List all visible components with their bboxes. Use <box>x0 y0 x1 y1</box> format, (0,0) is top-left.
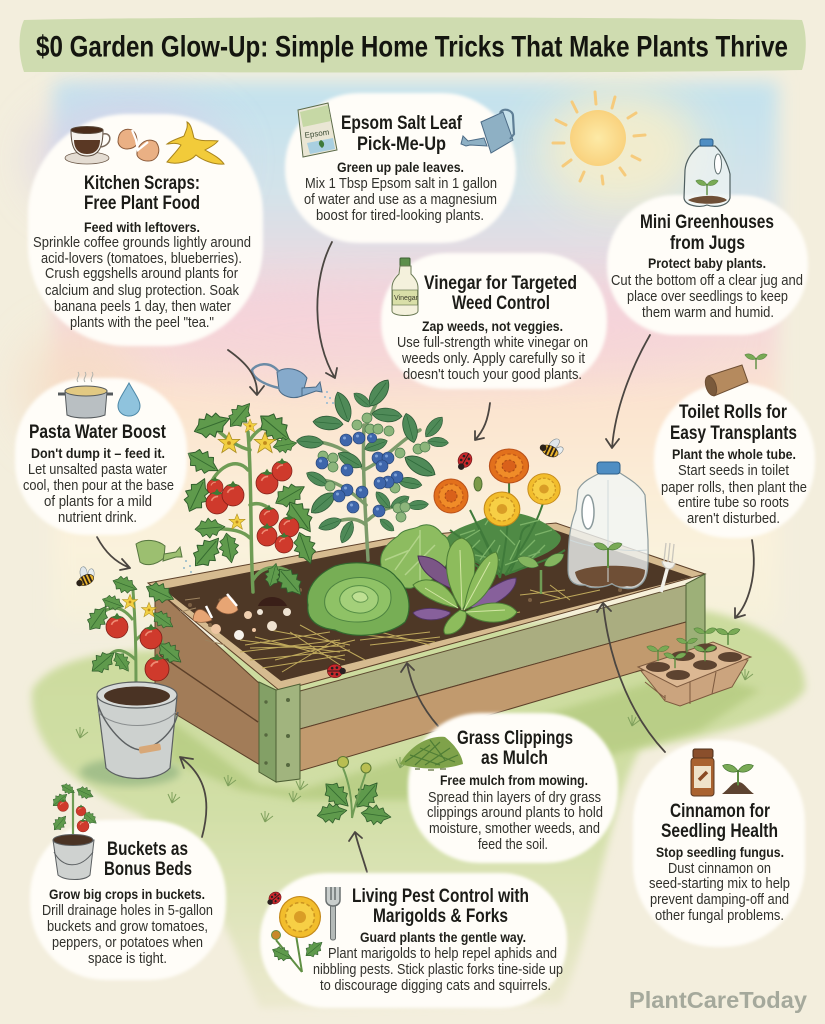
ladybug on rim <box>327 664 346 678</box>
body text: Spread thin layers of dry grass <box>428 790 601 806</box>
heading: Toilet Rolls for <box>679 402 787 423</box>
subheading: Green up pale leaves. <box>337 159 464 175</box>
heading: Pasta Water Boost <box>29 422 167 443</box>
heading line 2: Bonus Beds <box>104 859 192 880</box>
front upper plank <box>300 585 686 729</box>
subheading: Plant the whole tube. <box>672 446 796 462</box>
panel: grass clippings <box>400 713 618 863</box>
grass tufts <box>76 669 753 822</box>
blueberry bush <box>296 376 449 560</box>
panel: buckets <box>30 781 226 980</box>
body text: doesn't touch your good plants. <box>403 367 582 383</box>
subheading: Protect baby plants. <box>648 255 766 271</box>
panel: toilet rolls <box>654 354 815 538</box>
arrow: pasta to can <box>97 537 130 570</box>
panel: kitchen scraps <box>28 114 263 346</box>
red-veined greens <box>413 538 517 634</box>
arrow: pest control to dandelion <box>349 832 367 872</box>
body text <box>649 861 790 924</box>
heading line 2: from Jugs <box>670 233 745 254</box>
arrow: kitchen to tomato <box>228 350 264 395</box>
icon: coffee cup <box>65 126 110 164</box>
body text: weeds only. Apply carefully so it <box>401 351 585 367</box>
card background <box>28 114 263 346</box>
heading: Grass Clippings <box>457 728 573 749</box>
bed rim <box>148 523 705 691</box>
soil <box>163 529 692 681</box>
body text: of plants for a mild <box>44 494 152 510</box>
bee near marigolds <box>538 432 568 461</box>
heading: Vinegar for Targeted <box>424 273 577 294</box>
arrow: vinegar to weeds <box>475 403 490 440</box>
icon: water drop <box>118 383 140 416</box>
icon: cinnamon jar <box>691 749 714 796</box>
body text: calcium and slug protection. Soak <box>45 283 240 299</box>
body text: space is tight. <box>88 951 167 967</box>
icon: blue watering can <box>252 364 334 404</box>
ladybug near marigolds <box>454 450 475 473</box>
icon: jug with seedling <box>684 139 730 206</box>
card background <box>633 740 805 947</box>
eggshells in soil <box>193 594 291 640</box>
body text <box>313 946 563 994</box>
heading line 2: Marigolds & Forks <box>373 906 508 927</box>
body text <box>611 273 803 321</box>
arrow: cinnamon to jug <box>597 603 665 752</box>
body text <box>23 462 174 526</box>
body text: seed-starting mix to help <box>649 876 790 892</box>
heading line 2: Pick-Me-Up <box>357 134 446 155</box>
panel: living pest control <box>260 873 567 1008</box>
plastic jug greenhouse <box>568 462 648 589</box>
body text: Cut the bottom off a clear jug and <box>611 273 803 289</box>
body text: plants with the peel "tea." <box>70 315 214 331</box>
body text: Start seeds in toilet <box>678 463 789 479</box>
heading line 2: Seedling Health <box>661 821 778 842</box>
subheading: Don't dump it – feed it. <box>31 445 165 461</box>
body text: moisture, smother weeds, and <box>429 821 600 837</box>
seedling in bed <box>516 550 566 594</box>
card background <box>654 383 815 538</box>
plastic fork in soil <box>661 543 675 592</box>
body text <box>397 335 588 383</box>
heading line 2: Free Plant Food <box>84 193 200 214</box>
green shade under bed <box>170 670 760 800</box>
bee near bucket plant <box>70 562 99 589</box>
subheading: Grow big crops in buckets. <box>49 886 205 902</box>
heading line 2: as Mulch <box>481 748 548 769</box>
marigold patch <box>434 449 565 578</box>
body text <box>33 235 251 331</box>
icon: epsom bag: Epsom <box>304 128 330 140</box>
heading: Cinnamon for <box>670 801 770 822</box>
corner post right <box>686 574 705 666</box>
body text: to discourage digging cats and squirrels. <box>320 978 551 994</box>
icon: eggshells <box>118 129 159 161</box>
tomato plant <box>179 397 321 602</box>
bed left side <box>155 588 260 765</box>
body text: Crush eggshells around plants for <box>45 266 238 282</box>
body text <box>42 903 213 967</box>
body text: Let unsalted pasta water <box>28 462 167 478</box>
raised garden bed <box>80 523 760 800</box>
body text: prevent damping-off and <box>650 892 789 908</box>
corner post front <box>259 682 300 782</box>
body text: boost for tired-looking plants. <box>316 208 484 224</box>
card background <box>607 195 808 335</box>
card background <box>15 378 187 535</box>
panel: epsom salt <box>285 93 516 243</box>
icon: fork <box>326 887 340 940</box>
body text: Plant marigolds to help repel aphids and <box>328 946 557 962</box>
body text: entire tube so roots <box>678 495 789 511</box>
panel: vinegar <box>381 253 607 389</box>
body text: Drill drainage holes in 5-gallon <box>42 903 213 919</box>
body text: acid-lovers (tomatoes, blueberries). <box>41 251 242 267</box>
front lower plank <box>300 622 686 771</box>
dandelion weed <box>315 756 392 827</box>
icon: vinegar bottle: Vinegar <box>394 295 419 302</box>
card background <box>260 873 567 1008</box>
icon: vinegar bottle <box>392 258 419 316</box>
card background <box>408 713 618 863</box>
heading line 2: Easy Transplants <box>670 423 797 444</box>
icon: marigold <box>270 893 327 972</box>
soil specks <box>180 558 622 645</box>
arrow: jug card to jug <box>606 335 650 448</box>
body text: them warm and humid. <box>642 305 774 321</box>
arrow: grass to bed <box>401 663 438 726</box>
icon: small bucket with tomato plant <box>49 781 100 880</box>
card background <box>381 253 607 389</box>
subheading: Free mulch from mowing. <box>440 772 588 788</box>
body text: feed the soil. <box>478 837 548 853</box>
ground wash <box>32 610 805 1008</box>
card background <box>285 93 516 243</box>
title banner <box>20 17 806 72</box>
arrow: toilet roll to tray <box>735 540 754 618</box>
arrow: epsom to blueberry <box>317 242 337 378</box>
seedling tray <box>638 628 751 706</box>
body text: Sprinkle coffee grounds lightly around <box>33 235 251 251</box>
body text: paper rolls, then plant the <box>661 480 807 496</box>
heading line 2: Weed Control <box>452 293 550 314</box>
bucket shadow <box>80 758 180 786</box>
body text: clippings around plants to hold <box>427 805 603 821</box>
icon: sun <box>553 92 645 184</box>
subheading: Stop seedling fungus. <box>656 844 784 860</box>
heading: Living Pest Control with <box>352 886 529 907</box>
body text: Dust cinnamon on <box>668 861 771 877</box>
watercolor sky wash <box>20 82 778 622</box>
body text <box>427 790 603 853</box>
arrow: buckets <box>180 757 206 837</box>
body text <box>304 176 497 224</box>
body text: nibbling pests. Stick plastic forks tine-side up <box>313 962 563 978</box>
body text <box>661 463 807 527</box>
lettuce head <box>307 563 409 635</box>
body text: nutrient drink. <box>58 510 137 526</box>
panel: mini greenhouses <box>607 139 808 335</box>
icon: watering can <box>461 110 514 153</box>
straw mulch <box>240 585 600 672</box>
body text: cool, then pour at the base <box>23 478 174 494</box>
body text: banana peels 1 day, then water <box>54 299 231 315</box>
heading: Buckets as <box>107 839 188 860</box>
bucket with tomato plant <box>82 573 187 778</box>
body text: of water and use as a magnesium <box>304 192 497 208</box>
icon: banana peel <box>167 122 224 164</box>
subheading: Guard plants the gentle way. <box>360 929 526 945</box>
heading: Mini Greenhouses <box>640 212 774 233</box>
body text: peppers, or potatoes when <box>52 935 203 951</box>
icon: ladybug <box>264 890 284 908</box>
icon: cardboard tube with sprout <box>703 354 767 397</box>
body text: aren't disturbed. <box>687 511 780 527</box>
body text: Use full-strength white vinegar on <box>397 335 588 351</box>
icon: pot <box>58 372 113 418</box>
body text: other fungal problems. <box>655 908 784 924</box>
panel: cinnamon <box>633 740 805 947</box>
heading: Kitchen Scraps: <box>84 173 200 194</box>
panel: pasta water <box>15 372 187 535</box>
lettuce back <box>381 525 450 588</box>
subheading: Feed with leftovers. <box>84 219 200 235</box>
heading: Epsom Salt Leaf <box>341 113 463 134</box>
icon: epsom bag <box>298 103 337 157</box>
body text: buckets and grow tomatoes, <box>47 919 208 935</box>
footer logo text: PlantCareToday <box>629 987 807 1013</box>
subheading: Zap weeds, not veggies. <box>422 318 563 334</box>
body text: Mix 1 Tbsp Epsom salt in 1 gallon <box>305 176 497 192</box>
body text: place over seedlings to keep <box>627 289 788 305</box>
icon: green watering can <box>136 540 192 573</box>
icon: grass clippings pile <box>400 737 463 770</box>
icon: sprout <box>722 764 754 794</box>
card background <box>30 820 226 980</box>
